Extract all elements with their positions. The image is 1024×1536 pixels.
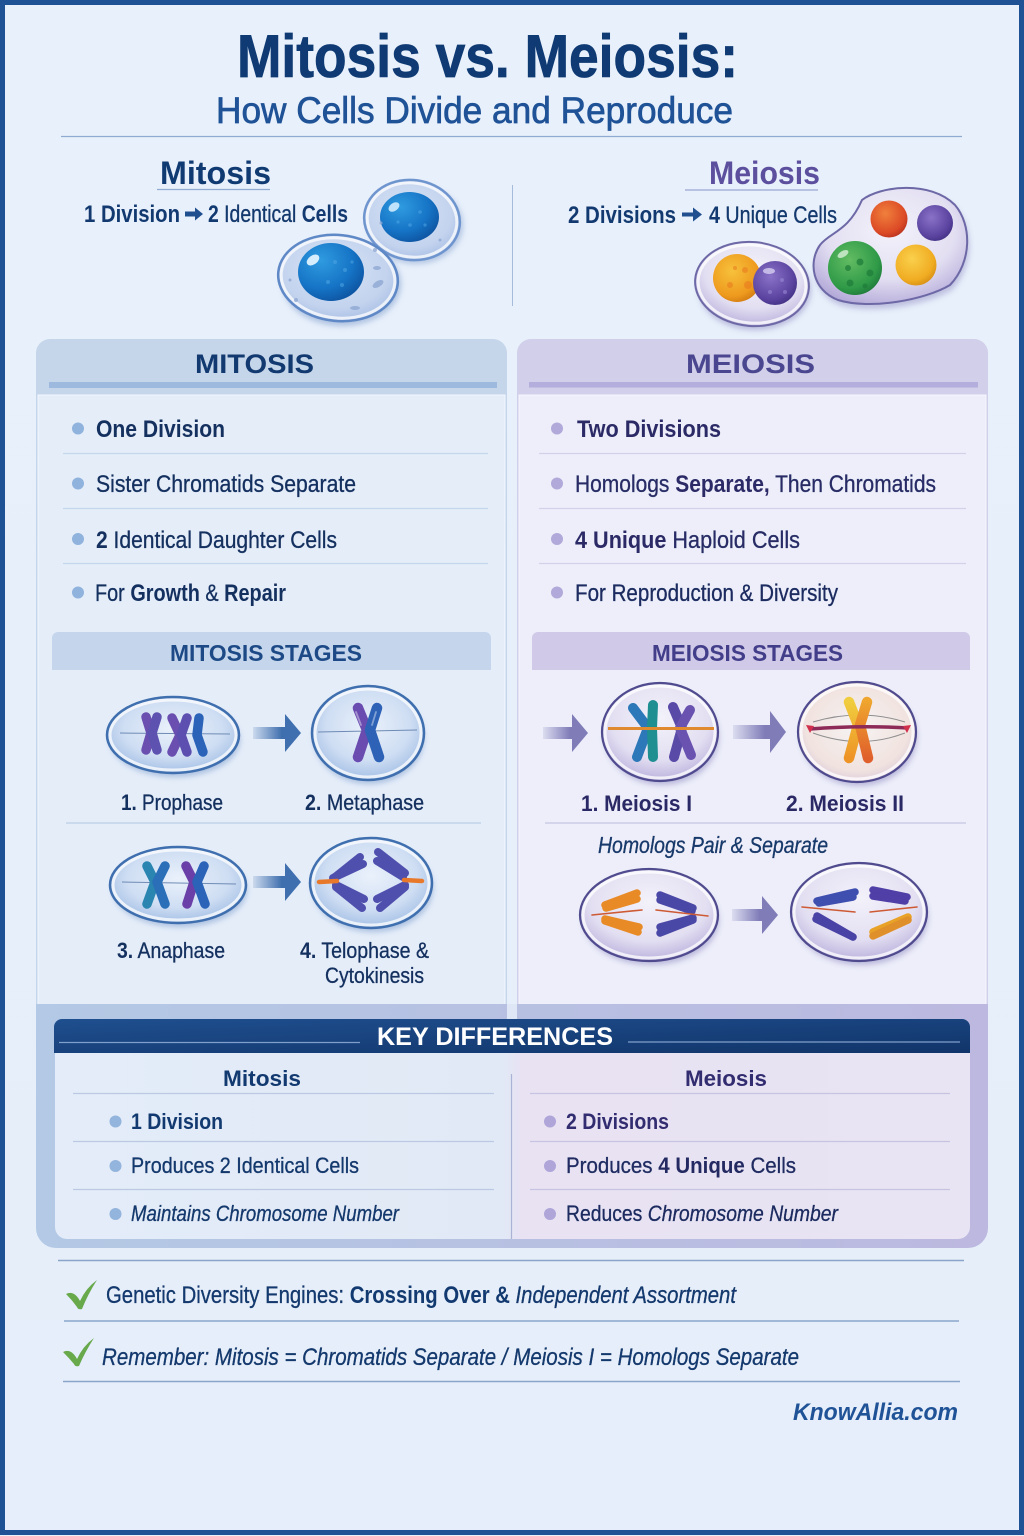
label: telophase and cytokinesis: Cytokinesis: [325, 963, 424, 988]
list: mitosis facts: 2 Identical Daughter Cells: [96, 527, 337, 554]
diagram: meiosis II: [798, 682, 917, 786]
panel: meiosis: [517, 339, 988, 1019]
note: remember: [63, 1338, 799, 1371]
label: metaphase: 2. Metaphase: [305, 790, 424, 815]
label: telophase and cytokinesis: 4. Telophase &: [300, 938, 429, 963]
intro: meiosis: [568, 155, 969, 331]
list: mitosis facts: [63, 416, 488, 607]
column: mitosis differences: 1 Division: [131, 1109, 223, 1134]
stages header: mitosis: MITOSIS STAGES: [170, 640, 362, 666]
diagram: telophase and cytokinesis: [310, 838, 433, 932]
stages header: meiosis: MEIOSIS STAGES: [652, 640, 843, 666]
diagram: anaphase: [110, 847, 247, 927]
list: meiosis facts: For Reproduction & Diversity: [575, 580, 838, 607]
note: remember: Remember: Mitosis = Chromatids Separate / Meiosis I = Homologs Separate: [102, 1344, 799, 1371]
note: genetic diversity: Genetic Diversity Engines: Crossing Over & Independent Assortment: [106, 1282, 737, 1309]
label: anaphase: 3. Anaphase: [117, 938, 225, 963]
list: mitosis facts: Sister Chromatids Separate: [96, 471, 356, 498]
label: prophase: 1. Prophase: [121, 790, 223, 815]
list: mitosis facts: For Growth & Repair: [95, 580, 286, 607]
arrow: [543, 714, 588, 752]
arrow: [732, 896, 778, 934]
text: 1 division to 2 identical cells: 1 Division: [84, 201, 180, 228]
text: 2 divisions to 4 unique cells: 2 Divisions: [568, 202, 676, 229]
diagram: prophase: [107, 697, 240, 777]
subtitle: How Cells Divide and Reproduce: [216, 90, 733, 131]
heading: meiosis intro: Meiosis: [709, 155, 820, 191]
heading: mitosis intro: Mitosis: [160, 155, 271, 191]
list: meiosis facts: [539, 416, 966, 607]
icon: two daughter cells: [274, 174, 465, 327]
icon: meiosis cells: [692, 188, 969, 331]
heading: meiosis panel: MEIOSIS: [686, 349, 815, 379]
diagram: homologs separate, second cell: [791, 863, 928, 965]
icon: check mark: [63, 1338, 94, 1366]
column: mitosis differences: Mitosis: [223, 1066, 301, 1091]
header bar: key differences: KEY DIFFERENCES: [377, 1023, 613, 1051]
arrow: [253, 863, 301, 901]
column: mitosis differences: Produces 2 Identical Cells: [131, 1153, 359, 1178]
heading: mitosis panel: MITOSIS: [195, 349, 314, 379]
diagram: homologs separate, first cell: [580, 869, 719, 965]
column: meiosis differences: 2 Divisions: [566, 1109, 669, 1134]
column: meiosis differences: Meiosis: [685, 1066, 767, 1091]
arrow: [733, 711, 786, 753]
stages header: mitosis: [52, 632, 491, 670]
diagram: meiosis I: [602, 683, 719, 785]
text: 2 divisions to 4 unique cells: [568, 202, 837, 229]
list: meiosis facts: 4 Unique Haploid Cells: [575, 527, 800, 554]
column: mitosis differences: Maintains Chromosome Number: [131, 1201, 400, 1226]
label: meiosis II: 2. Meiosis II: [786, 791, 904, 816]
caption: homologs pair and separate: Homologs Pair & Separate: [598, 832, 828, 858]
icon: check mark: [66, 1280, 97, 1309]
panel: key differences: [36, 1004, 988, 1248]
list: mitosis facts: One Division: [96, 416, 225, 443]
label: meiosis I: 1. Meiosis I: [581, 791, 692, 816]
column: meiosis differences: [530, 1066, 950, 1226]
list: meiosis facts: Homologs Separate, Then Chromatids: [575, 471, 936, 498]
column: meiosis differences: Produces 4 Unique Cells: [566, 1153, 796, 1178]
diagram: metaphase: [312, 686, 424, 784]
text: 1 division to 2 identical cells: 2 Identical Cells: [208, 201, 348, 228]
list: meiosis facts: Two Divisions: [577, 416, 721, 443]
header bar: key differences: [54, 1019, 970, 1053]
title: Mitosis vs. Meiosis:: [237, 23, 738, 90]
label: telophase and cytokinesis: [300, 938, 429, 988]
panel: mitosis: [36, 339, 507, 1019]
arrow: [253, 714, 301, 752]
column: mitosis differences: [73, 1066, 494, 1226]
brand: KnowAllia.com: KnowAllia.com: [793, 1399, 958, 1426]
column: meiosis differences: Reduces Chromosome Number: [566, 1201, 839, 1226]
intro: mitosis: [84, 155, 465, 327]
text: 2 divisions to 4 unique cells: 4 Unique Cells: [709, 202, 837, 229]
text: 1 division to 2 identical cells: [84, 201, 348, 228]
stages header: meiosis: [532, 632, 970, 670]
